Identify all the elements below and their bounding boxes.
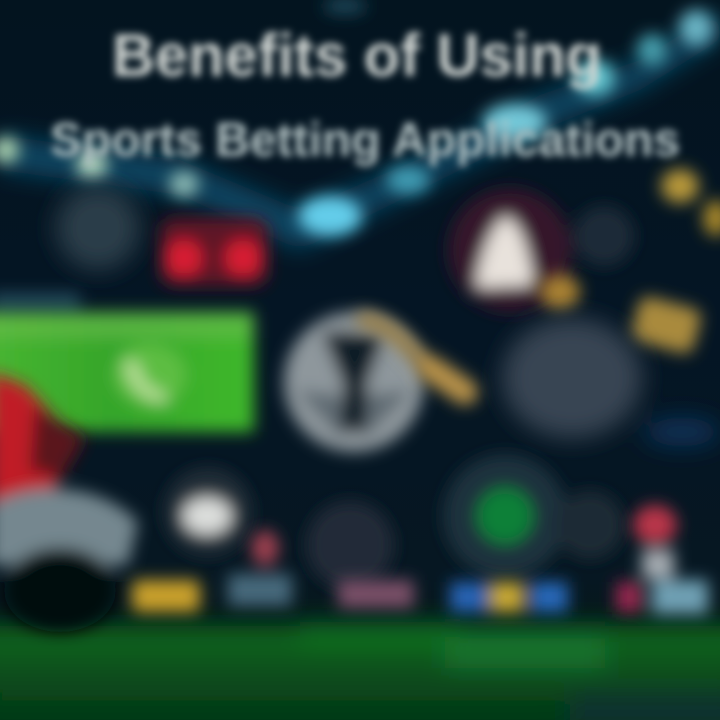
icon: grey disc left <box>56 186 140 270</box>
chart: colored blocks along bottom <box>132 505 708 614</box>
icon: maroon badge with white figure <box>448 188 634 312</box>
light streak behind title <box>0 10 720 250</box>
grass field <box>0 622 720 720</box>
arrow: gold ribbon <box>365 320 465 392</box>
panel: green phone screen <box>0 294 254 432</box>
icon: grey round panel <box>502 318 720 446</box>
icon: red binoculars <box>160 218 268 286</box>
glowing streak highlights <box>0 0 713 236</box>
figure: player in red shirt <box>0 372 138 632</box>
icon: green dot dial <box>306 454 624 589</box>
title: Benefits of Using <box>112 22 602 89</box>
title: Sports Betting Applications <box>50 114 680 167</box>
icon: gold tags right <box>540 169 720 356</box>
icon: white cloud badge <box>164 468 252 556</box>
title <box>50 22 680 167</box>
icon: white trophy disc <box>284 312 424 452</box>
